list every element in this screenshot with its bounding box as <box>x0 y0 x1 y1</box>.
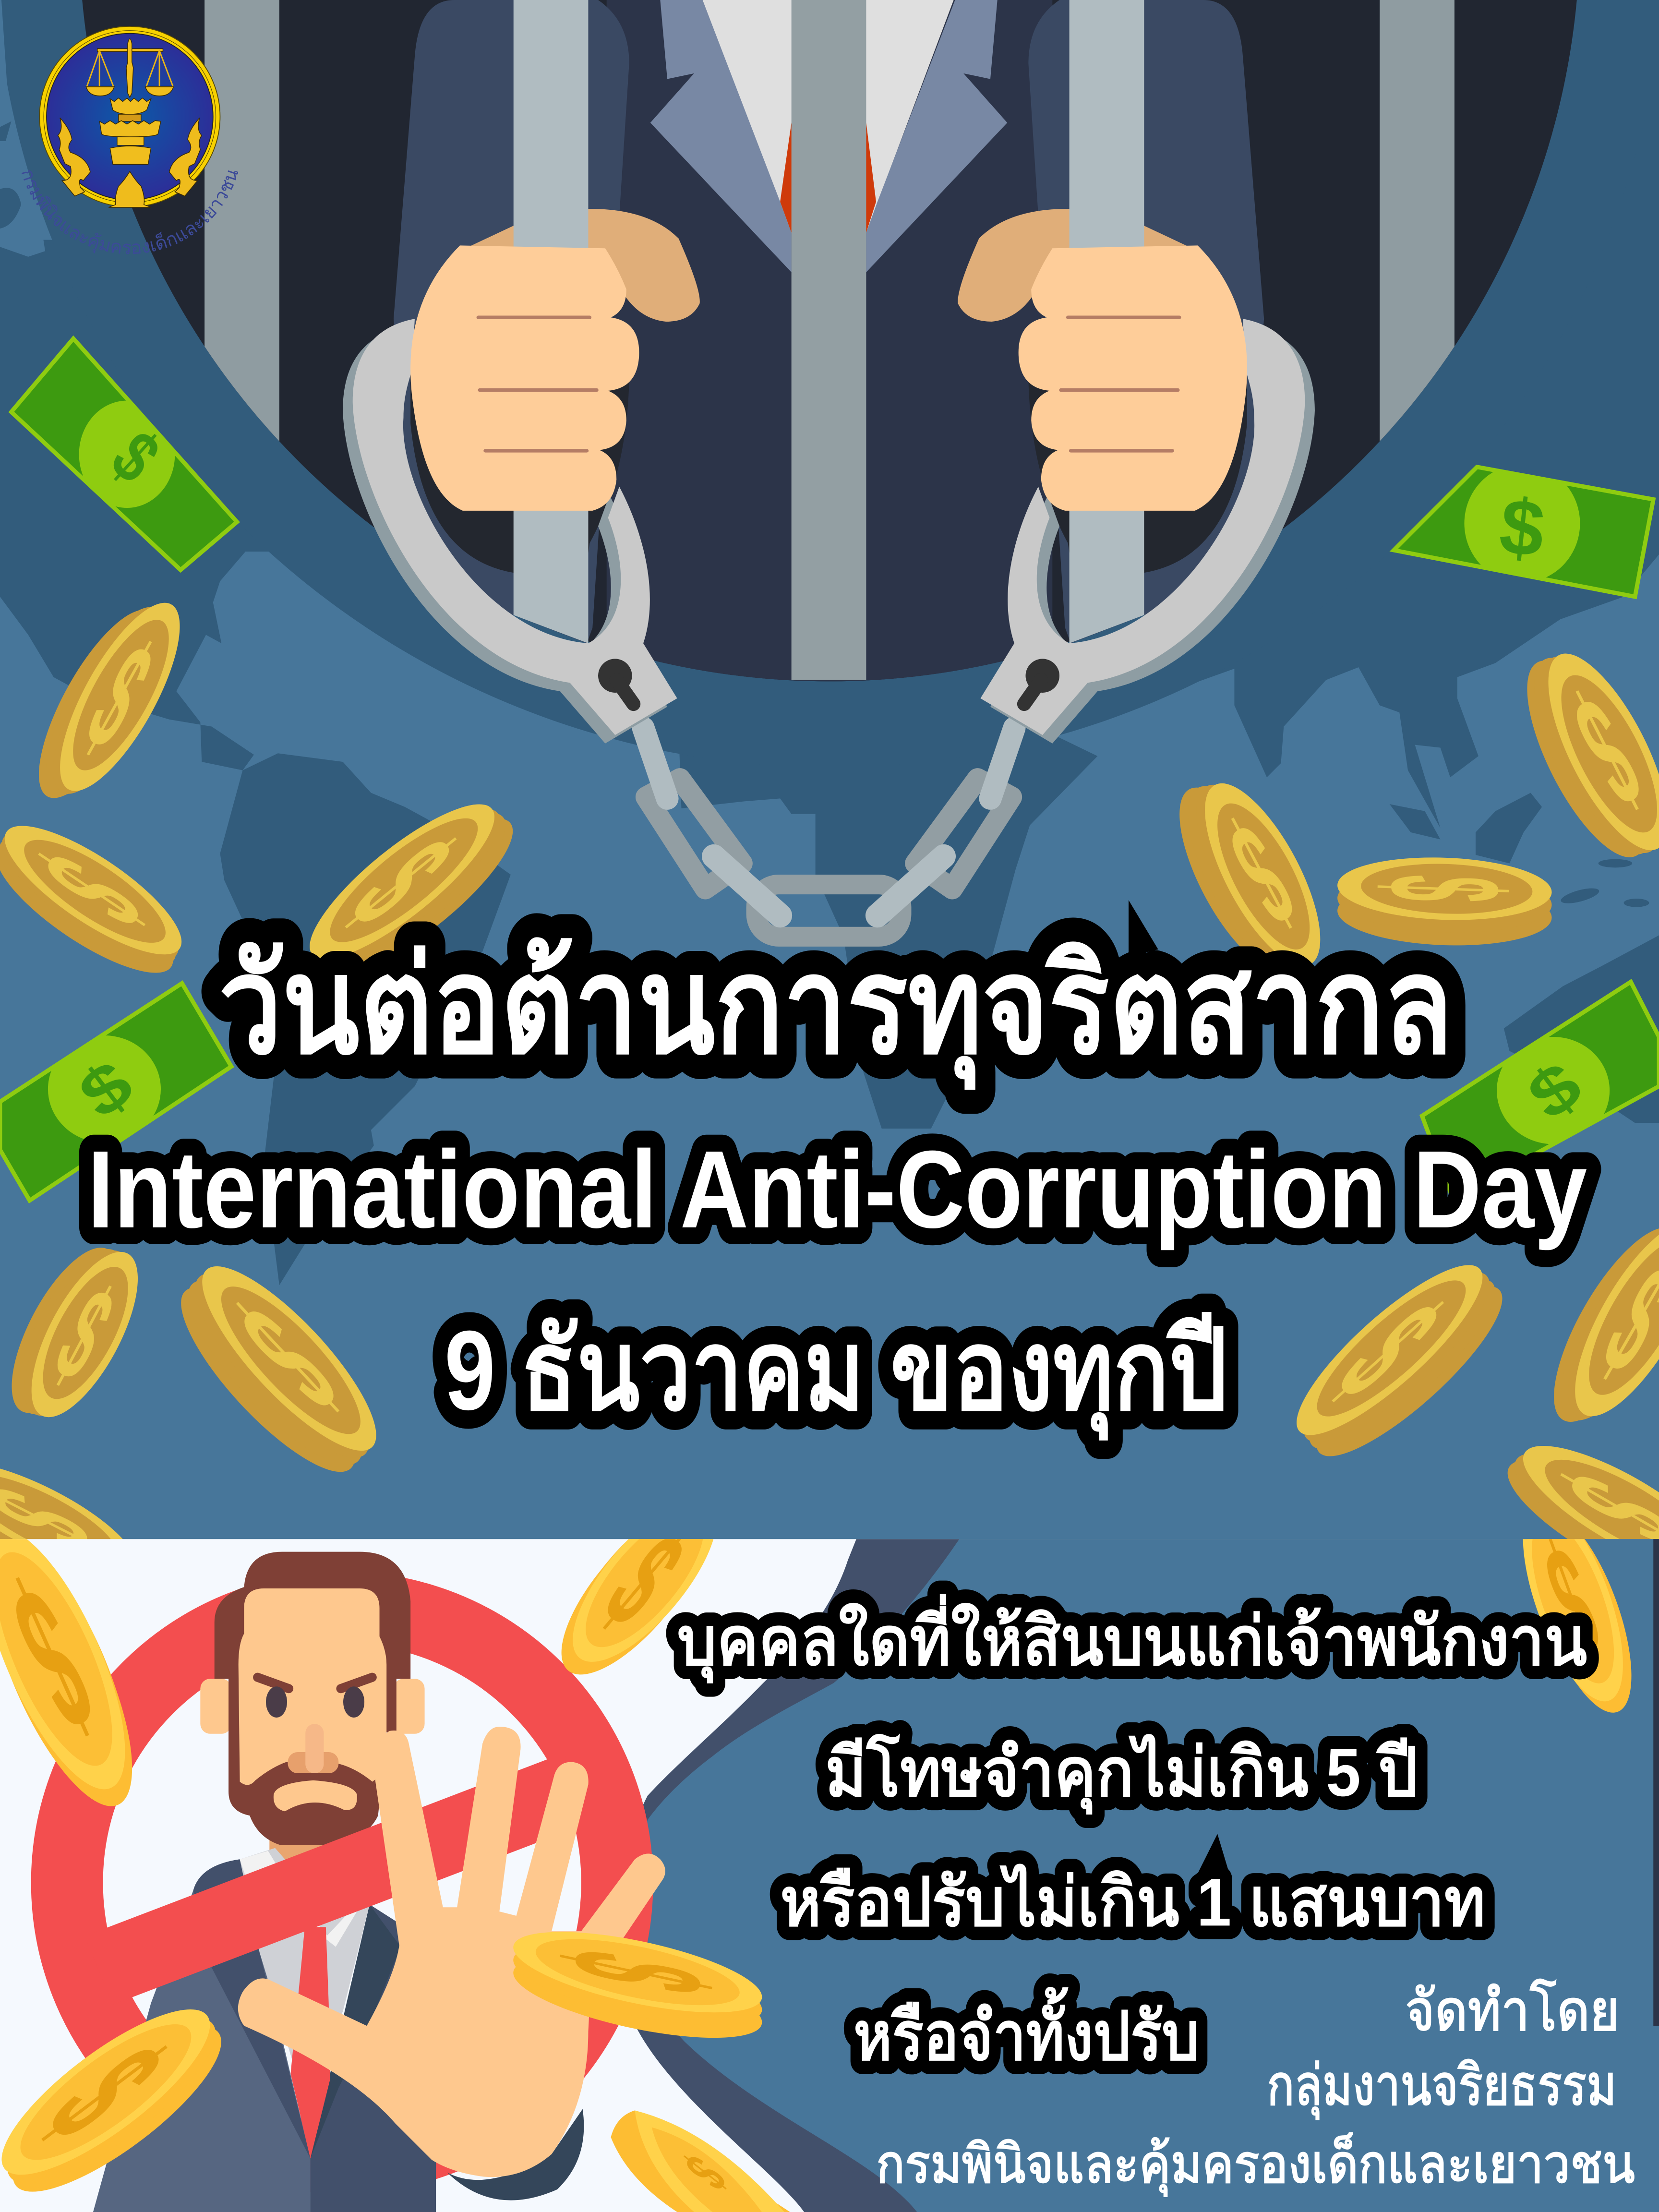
handcuff <box>343 319 677 744</box>
text: penalty line 4: หรือจำทั้งปรับ <box>854 1987 1199 2074</box>
hand <box>410 245 639 511</box>
icon: coin 12 <box>1492 1424 1659 1610</box>
chain links <box>643 728 780 915</box>
text: penalty line 3: หรือปรับไม่เกิน 1 แสนบาท <box>780 1863 1486 1940</box>
icon: coin 8 <box>1157 768 1343 986</box>
eyes <box>266 1686 364 1718</box>
icon: coin 4 <box>0 1233 159 1432</box>
curved dark band <box>615 1539 1659 2212</box>
jacket cuff <box>447 2109 584 2200</box>
icon: money bill top right: $ <box>1496 481 1549 574</box>
icon: coin 2 <box>0 805 198 994</box>
icon: coin 2: $ <box>13 830 173 950</box>
icon: coin 8: $ <box>1209 792 1316 957</box>
prison bar <box>514 0 588 643</box>
suit torso <box>607 0 1052 705</box>
far prison bars <box>204 0 1455 442</box>
centre prison bar <box>792 0 866 680</box>
scales of justice <box>86 39 173 97</box>
icon: bright coin upper right <box>1503 1489 1652 1724</box>
background: world map panel <box>0 0 1659 1539</box>
icon: bright coin bottom centre: $ <box>672 2144 739 2201</box>
icon: bright coin top centre: $ <box>577 1504 712 1656</box>
icon: coin 10: $ <box>1305 1272 1475 1429</box>
shadow behind hand <box>410 353 629 573</box>
hair and beard <box>215 1552 410 1845</box>
mouth <box>274 1780 357 1811</box>
credit: made by: จัดทำโดย <box>1405 1979 1620 2042</box>
title: Thai heading: วันต่อต้านการทุจริตสากล <box>219 930 1453 1091</box>
naga ornaments <box>58 118 202 207</box>
icon: coin 9: $ <box>1355 873 1535 905</box>
suit <box>93 1859 311 2212</box>
ears <box>200 1679 231 1734</box>
icon: bright coin upper left <box>0 1511 160 1824</box>
icon: money bill right: $ <box>1514 1047 1595 1134</box>
icon: money bill left: $ <box>65 1046 146 1132</box>
icon: coin 9 <box>1336 854 1553 949</box>
right edge line <box>1653 1539 1659 2026</box>
prohibition ring <box>67 1608 617 2158</box>
icon: money bill top left <box>12 338 237 570</box>
icon: money bill top right <box>1394 464 1653 597</box>
chain: centre link <box>756 885 902 937</box>
prison window: dark circle with bars and suit <box>79 0 1580 705</box>
panel: lower section <box>0 1477 1659 2212</box>
sleeve <box>394 0 629 643</box>
nose <box>305 1724 324 1773</box>
face <box>239 1588 386 1785</box>
nostrils <box>288 1752 338 1773</box>
icon: coin 5 <box>158 1245 399 1493</box>
icon: bright coin on hand: $ <box>531 1937 744 2007</box>
icon: coin 5: $ <box>209 1274 370 1443</box>
icon: bright coin upper right: $ <box>1528 1513 1618 1690</box>
icon: bright coin top centre <box>538 1477 740 1696</box>
neck <box>269 1834 323 1865</box>
left arm, handcuff and hand <box>343 0 780 915</box>
raised hand <box>238 1727 665 2177</box>
keyhole <box>598 659 634 704</box>
icon: bright coin on hand <box>507 1915 768 2055</box>
continents <box>0 0 1659 1285</box>
right lapel <box>866 0 1007 272</box>
icon: bright coin lower left: $ <box>11 2015 201 2169</box>
icon: bright coin bottom centre <box>611 2110 790 2212</box>
icon: coin 1 <box>17 587 202 814</box>
light map fragments at upper left <box>0 0 45 257</box>
text: penalty line 1: บุคคลใดที่ให้สินบนแก่เจ้าพนักงาน <box>677 1594 1587 1684</box>
icon: coin 11 <box>1530 1205 1659 1439</box>
logo: Department of Juvenile Observation and Protection seal <box>21 26 238 254</box>
date line: 9 ธันวาคม ของทุกปี <box>445 1307 1227 1441</box>
thumb <box>466 209 700 322</box>
right arm, handcuff and hand <box>878 0 1315 915</box>
prohibition bar <box>84 1753 578 2005</box>
icon: money bill left <box>0 983 231 1201</box>
icon: money bill right <box>1422 982 1659 1199</box>
text: penalty line 3 <box>780 1834 1486 1940</box>
eyebrows <box>258 1677 372 1689</box>
tie <box>290 1927 330 2158</box>
blue text area <box>637 1539 1659 2212</box>
icon: coin 4: $ <box>36 1260 134 1409</box>
left lapel <box>650 0 792 272</box>
icon: money bill top left: $ <box>96 416 175 498</box>
icon: coin 10 <box>1277 1244 1522 1478</box>
shirt <box>240 1848 370 2092</box>
icon: coin 3 <box>291 782 531 995</box>
icon: coin 3: $ <box>318 810 486 953</box>
man illustration <box>93 1552 436 2212</box>
white shirt <box>703 0 954 233</box>
pedestal <box>99 98 161 164</box>
icon: coin 7 <box>1504 638 1659 873</box>
curved department name: กรมพินิจและคุ้มครองเด็กและเยาวชน <box>21 170 238 254</box>
red tie <box>780 123 876 233</box>
text: penalty line 2: มีโทษจำคุกไม่เกิน 5 ปี <box>825 1733 1418 1815</box>
icon: coin 1: $ <box>64 613 176 781</box>
icon: bright coin lower left <box>0 1984 242 2212</box>
icon: coin 6 <box>0 1442 148 1611</box>
